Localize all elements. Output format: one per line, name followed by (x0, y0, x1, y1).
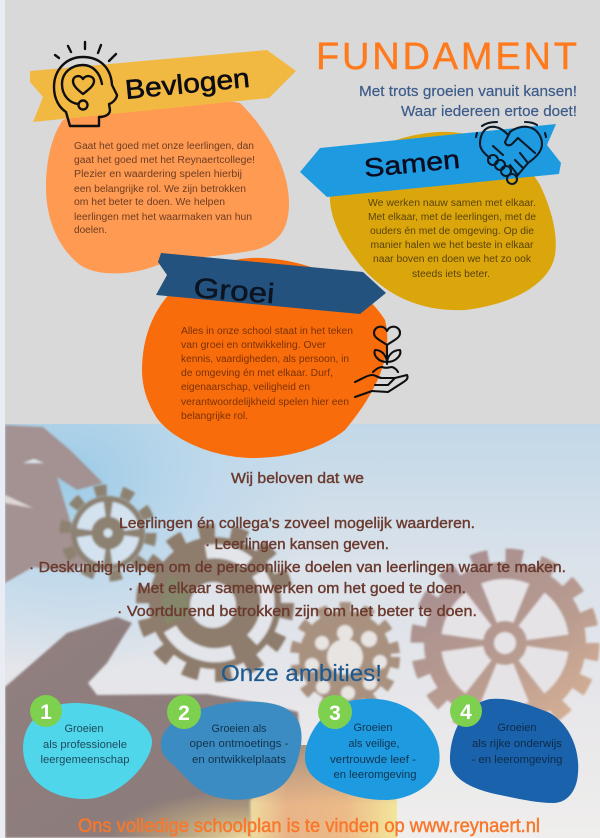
text block: promises: · Leerlingen kansen geven. (205, 536, 389, 553)
panel: ambition 3: 3 (329, 702, 341, 725)
panel: ambition 4: Groeien (498, 722, 536, 734)
panel: ambition 4: - en leeromgeving (472, 754, 562, 766)
text block: Samen: We werken nauw samen met elkaar. (368, 198, 536, 209)
text block: Samen: ouders én met de omgeving. Op die (370, 226, 534, 237)
panel: ambition 1: Groeien (64, 723, 104, 735)
panel: Groei blob (142, 258, 387, 458)
text block: Samen: Met elkaar, met de leerlingen, met de (368, 212, 536, 223)
panel: ambition 1: als professionele (43, 739, 127, 751)
panel: Bevlogen blob (46, 100, 289, 273)
panel: ambition 1: 1 (40, 701, 52, 724)
panel: ambition 2: 2 (178, 702, 190, 725)
panel: ambition 3: vertrouwde leef - (330, 754, 416, 766)
icon: hand with heart plant (355, 327, 408, 397)
gear 4 (418, 556, 592, 730)
panel: ambition 1 (23, 695, 152, 799)
text block: Groei: van groei en ontwikkeling. Over (181, 340, 327, 351)
subtitle (359, 84, 577, 120)
subtitle: Met trots groeien vanuit kansen! (359, 84, 577, 100)
title: FUNDAMENT (316, 36, 577, 78)
panel: ambition 3: als veilige, (348, 738, 400, 750)
panel: ambition 4: 4 (460, 701, 472, 724)
panel: ambition 3: en leeromgeving (334, 769, 416, 781)
text block: Groei: Alles in onze school staat in het teken (181, 326, 353, 337)
gear 3 (295, 607, 395, 707)
text block: promises (29, 470, 566, 620)
panel: ambition 3 (305, 695, 440, 800)
photo background: hands holding gears against the sky (5, 424, 600, 838)
text block: Bevlogen: gaat het goed met het Reynaertcollege! (74, 155, 255, 166)
text block: Bevlogen: Plezier en waardering spelen hierbij (74, 169, 242, 180)
text block: Bevlogen: leerlingen met het waarmaken van hun (74, 212, 252, 223)
panel: Samen blob (330, 132, 556, 310)
text block: Bevlogen: een belangrijke rol. We zijn betrokken (74, 184, 246, 195)
icon: head with heart (54, 42, 117, 126)
panel: ambition 1: leergemeenschap (40, 754, 130, 766)
text block: Samen: naar boven en doen we het zo ook (373, 254, 531, 265)
icon: handshake heart (476, 122, 546, 184)
heading: Bevlogen: Bevlogen (124, 63, 251, 105)
ribbon: Bevlogen (30, 50, 296, 122)
panel: ambition 3: Groeien (354, 722, 392, 734)
text block: Bevlogen: om het beter te doen. We helpen (74, 197, 225, 208)
text block: promises: Wij beloven dat we (231, 470, 364, 487)
warm sunlight (250, 745, 397, 838)
text block: Bevlogen (74, 141, 255, 236)
panel: ambition 2: open ontmoetings - (190, 738, 289, 750)
panel: ambition 4: als rijke onderwijs (472, 738, 563, 750)
text block: promises: · Voortdurend betrokken zijn om het beter te doen. (117, 603, 477, 620)
heading: Samen: Samen (363, 144, 461, 183)
text block: Bevlogen: doelen. (74, 225, 107, 236)
top grey background (5, 0, 600, 424)
text block: Groei: belangrijke rol. (181, 411, 248, 422)
panel: ambition 2: en ontwikkelplaats (192, 754, 287, 766)
heading: Groei: Groei (193, 272, 276, 309)
footer link text: Ons volledige schoolplan is te vinden op www.reynaert.nl (78, 816, 540, 837)
ribbon: Samen (300, 124, 561, 197)
text block: Groei: kennis, vaardigheden, als persoon, in (181, 354, 349, 365)
heading: Onze ambities: Onze ambities! (221, 660, 382, 686)
panel: ambition 2: Groeien als (212, 723, 267, 735)
text block: promises: · Deskundig helpen om de persoonlijke doelen van leerlingen waar te maken. (29, 559, 566, 576)
upper hand (5, 425, 103, 583)
gear 2 (143, 531, 287, 675)
lower hand and gear mass (5, 617, 300, 838)
gear 1 (65, 490, 151, 576)
text block: Groei: de omgeving én met elkaar. Durf, (181, 368, 333, 379)
text block: Samen: steeds iets beter. (412, 269, 490, 280)
panel: ambition 4 (450, 695, 578, 803)
text block: Bevlogen: Gaat het goed met onze leerlingen, dan (74, 141, 254, 152)
subtitle: Waar iedereen ertoe doet! (401, 104, 577, 120)
text block: Samen: manier halen we het beste in elkaar (370, 240, 534, 251)
ribbon: Groei (156, 253, 386, 314)
text block: Groei: verantwoordelijkheid spelen hier een (181, 397, 349, 408)
panel: ambition 2 (161, 695, 302, 800)
text block: promises: Leerlingen én collega's zoveel mogelijk waarderen. (119, 515, 475, 532)
text block: Groei (181, 326, 353, 422)
text block: Samen (368, 198, 536, 280)
text block: Groei: eigenaarschap, veiligheid en (181, 382, 310, 393)
text block: promises: · Met elkaar samenwerken om het goed te doen. (128, 580, 466, 597)
